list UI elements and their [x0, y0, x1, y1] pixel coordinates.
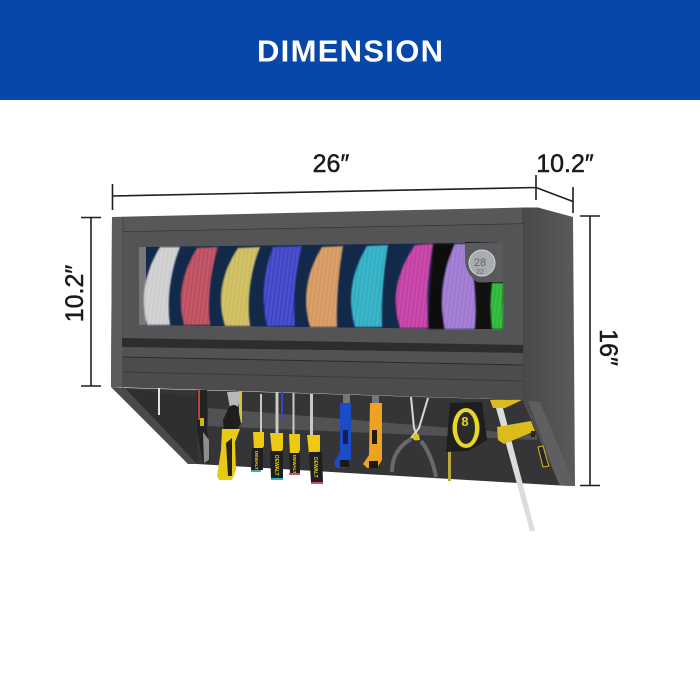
- door: [123, 224, 523, 345]
- hygrometer dial: [469, 250, 495, 276]
- door handle slot: [122, 338, 523, 353]
- spool: cyan: [351, 245, 388, 327]
- tool: tape measure: [446, 402, 487, 481]
- hygrometer dial: 28: [474, 257, 486, 269]
- dimension: depth 10.2 inches: [536, 150, 594, 213]
- screwdriver 1: DEWALT: [254, 451, 259, 470]
- dimension: left height 10.2 inches: [61, 218, 101, 386]
- hygrometer panel: [465, 242, 503, 282]
- tool: blue box cutter: [334, 395, 351, 468]
- tool: wire stripper pliers: [217, 391, 242, 480]
- tool: small screwdriver on the right: [538, 446, 549, 467]
- hygrometer dial: 22: [476, 269, 484, 276]
- tool rail: [208, 408, 537, 440]
- spool: yellow: [221, 247, 260, 326]
- spool: white: [144, 247, 180, 325]
- dimension: total height 16 inches: [580, 216, 622, 486]
- spool: orange: [306, 246, 343, 327]
- dimension: width 26 inches: 26″: [313, 150, 349, 178]
- tool: bar clamp: [490, 400, 535, 531]
- tool: orange box cutter: [363, 395, 382, 468]
- cabinet front frame: [111, 208, 523, 400]
- tool: tape measure: 8: [461, 414, 469, 429]
- tool: needle nose pliers: [392, 397, 436, 477]
- screwdriver 4: DEWALT: [312, 457, 318, 478]
- header banner: [0, 0, 700, 100]
- spool: blue: [264, 246, 302, 326]
- tool bay left wall: [125, 388, 197, 464]
- dimension: left height 10.2 inches: 10.2″: [61, 265, 89, 322]
- spool: red: [181, 247, 218, 325]
- screwdriver 2: DEWALT: [273, 455, 279, 476]
- dimension: width 26 inches: [112, 150, 536, 210]
- filament cabinet: [111, 208, 575, 486]
- tool: screwdrivers: [251, 392, 323, 484]
- screwdriver 3: DEWALT: [292, 455, 297, 474]
- window with spools: [139, 242, 503, 329]
- cabinet left cut edge: [111, 387, 197, 464]
- title: DIMENSION: [257, 34, 443, 68]
- tool: utility blade: [197, 390, 210, 463]
- dimension: total height 16 inches: 16″: [594, 329, 622, 366]
- tool bay back wall: [125, 388, 560, 486]
- spool: black divider: [428, 244, 455, 329]
- hook: small pin: [158, 388, 160, 415]
- spool: magenta: [396, 244, 433, 328]
- dimension: depth 10.2 inches: 10.2″: [536, 150, 594, 178]
- cabinet side panel: [523, 208, 575, 486]
- spool: green: [490, 283, 503, 329]
- spool: purple: [442, 244, 476, 329]
